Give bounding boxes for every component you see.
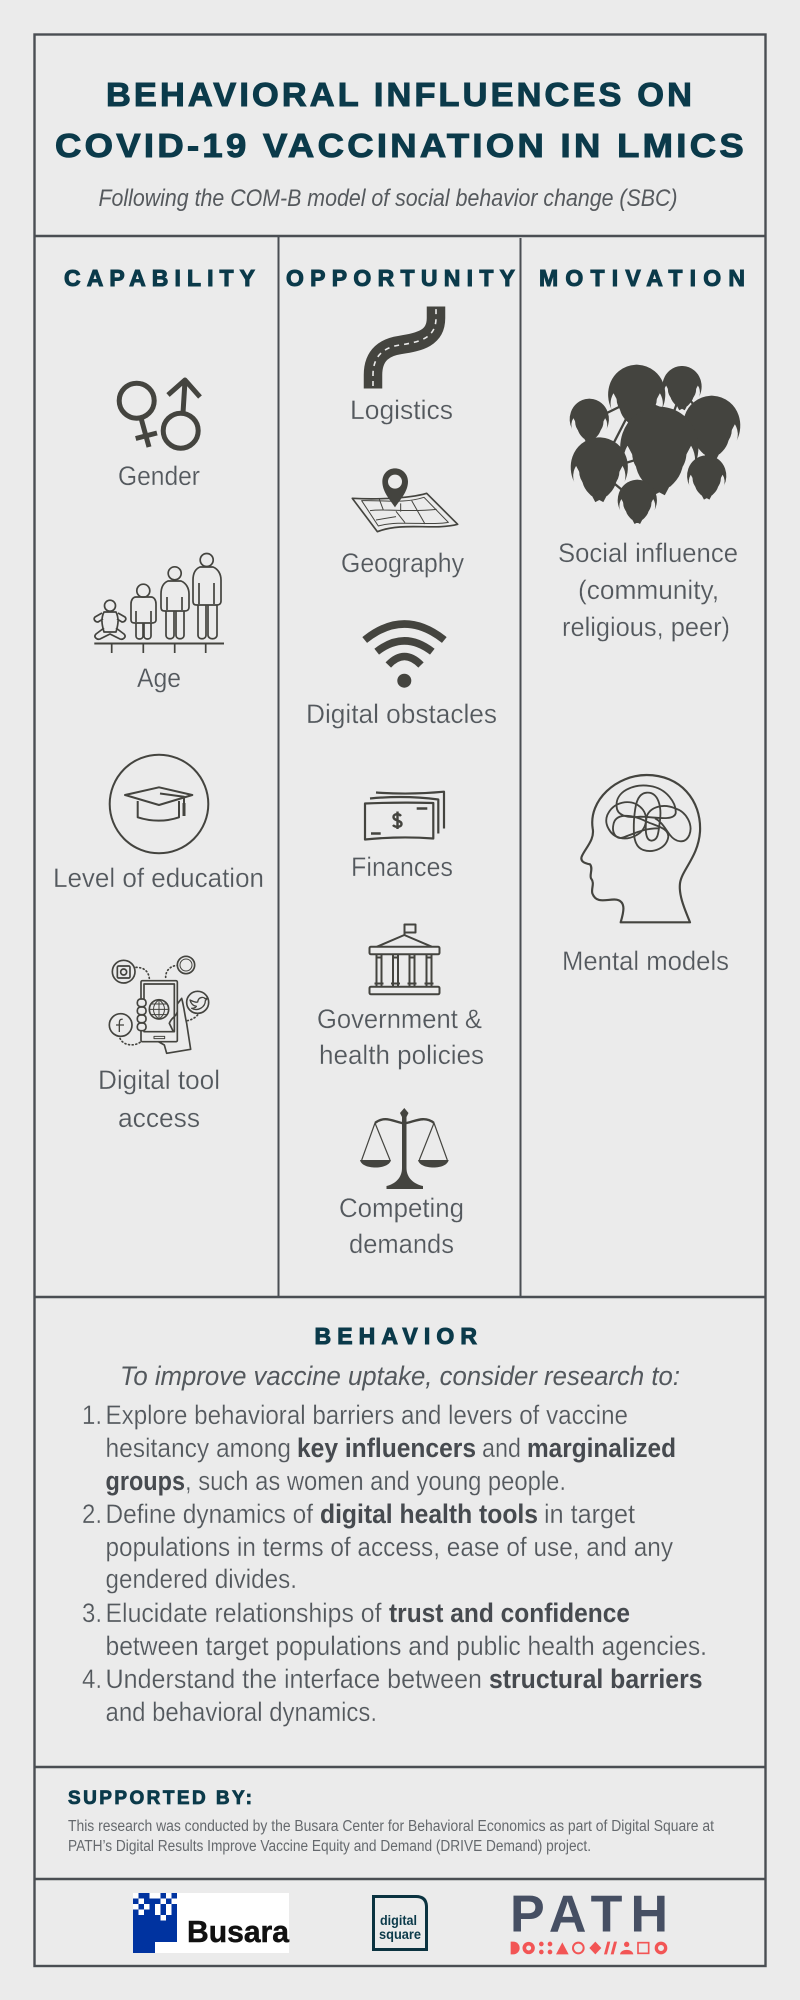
logo: PATH: PATH	[510, 1886, 668, 1944]
item 1: hesitancy among	[106, 1433, 291, 1463]
heading: motivation: MOTIVATION	[539, 265, 745, 291]
heading: opportunity: OPPORTUNITY	[286, 265, 515, 291]
item 1: 1.	[82, 1400, 102, 1430]
item 4	[82, 1664, 702, 1727]
item 4: structural barriers	[489, 1664, 702, 1694]
logo: digital square: digital	[380, 1912, 417, 1928]
item 2: Define dynamics of	[106, 1499, 313, 1529]
label: competing demands: demands	[349, 1229, 454, 1259]
item 2: 2.	[82, 1499, 102, 1529]
label: geography: Geography	[341, 548, 464, 578]
label: government and health policies: health policies	[319, 1040, 484, 1070]
label: gender: Gender	[118, 461, 200, 491]
label: mental models: Mental models	[562, 946, 729, 976]
item 3: trust and confidence	[389, 1598, 630, 1628]
item 1: and	[482, 1433, 521, 1463]
heading: capability: CAPABILITY	[64, 265, 255, 291]
label: age: Age	[137, 663, 181, 693]
panel: behavior	[35, 1298, 765, 1766]
panel: capability	[35, 237, 278, 1297]
item 1: , such as women and young people.	[185, 1466, 566, 1496]
logo: Busara: Busara	[187, 1914, 290, 1949]
acknowledgement text: This research was conducted by the Busara Center for Behavioral Economics as part of Digital Square at	[68, 1818, 715, 1835]
label: social influence: religious, peer)	[562, 612, 730, 642]
icon: head with tangled thoughts	[581, 775, 700, 922]
label: education: Level of education	[53, 863, 264, 893]
item 1: groups	[106, 1466, 185, 1496]
panel: supported by	[35, 1768, 765, 1878]
label: digital tool: access	[118, 1103, 200, 1133]
icon: money	[365, 792, 444, 840]
label: logistics: Logistics	[350, 395, 453, 425]
label: finances: Finances	[351, 852, 453, 882]
acknowledgement text	[68, 1818, 715, 1855]
icon: map pin	[352, 468, 458, 532]
panel: header	[35, 35, 765, 235]
label: digital tool: Digital tool	[98, 1065, 220, 1095]
item 3: 3.	[82, 1598, 102, 1628]
item 3: Elucidate relationships of	[106, 1598, 382, 1628]
label: competing demands	[339, 1193, 464, 1259]
subtitle: Following the COM-B model of social behavior change (SBC)	[98, 185, 678, 212]
item 2: digital health tools	[320, 1499, 538, 1529]
item 2	[82, 1499, 673, 1594]
label: social influence: (community,	[578, 575, 719, 605]
panel: opportunity	[279, 237, 520, 1297]
heading: supported by: SUPPORTED BY:	[68, 1788, 252, 1809]
item 1	[82, 1400, 676, 1496]
label: digital obstacles: Digital obstacles	[306, 699, 497, 729]
label: government and health policies	[317, 1004, 484, 1070]
item 2: gendered divides.	[106, 1564, 297, 1594]
heading: behavior: BEHAVIOR	[314, 1323, 477, 1349]
title: COVID-19 VACCINATION IN LMICS	[55, 127, 747, 164]
icon: scales	[360, 1108, 449, 1189]
label: government and health policies: Government &	[317, 1004, 482, 1034]
item 3: between target populations and public health agencies.	[106, 1631, 707, 1661]
icon: social network	[576, 376, 731, 516]
item 4: and behavioral dynamics.	[106, 1697, 377, 1727]
icon: government building	[370, 924, 440, 994]
panel: logos	[35, 1880, 765, 1965]
item 3	[82, 1598, 707, 1661]
item 1: key influencers	[297, 1433, 476, 1463]
title	[55, 76, 747, 164]
intro sentence: To improve vaccine uptake, consider research to:	[120, 1361, 680, 1391]
icon: gender	[119, 380, 200, 448]
item 1: Explore behavioral barriers and levers of vaccine	[106, 1400, 628, 1430]
item 4: Understand the interface between	[106, 1664, 482, 1694]
icon: road	[373, 306, 436, 388]
panel: motivation	[521, 237, 765, 1297]
icon: age	[94, 554, 224, 653]
item 2: in target	[544, 1499, 635, 1529]
logo: Busara	[133, 1893, 290, 1953]
logo: digital square	[374, 1896, 426, 1950]
item 4: 4.	[82, 1664, 102, 1694]
item 1: marginalized	[527, 1433, 676, 1463]
icon: education	[110, 755, 208, 853]
icon: digital tool	[109, 956, 209, 1053]
item 2: populations in terms of access, ease of use, and any	[106, 1532, 673, 1562]
logo: digital square: square	[379, 1926, 421, 1942]
label: social influence: Social influence	[558, 538, 738, 568]
label: social influence	[558, 538, 738, 642]
label: competing demands: Competing	[339, 1193, 464, 1223]
icon: wifi	[365, 624, 444, 688]
label: digital tool	[98, 1065, 220, 1133]
title: BEHAVIORAL INFLUENCES ON	[106, 76, 695, 113]
acknowledgement text: PATH’s Digital Results Improve Vaccine Equity and Demand (DRIVE Demand) project.	[68, 1838, 591, 1855]
